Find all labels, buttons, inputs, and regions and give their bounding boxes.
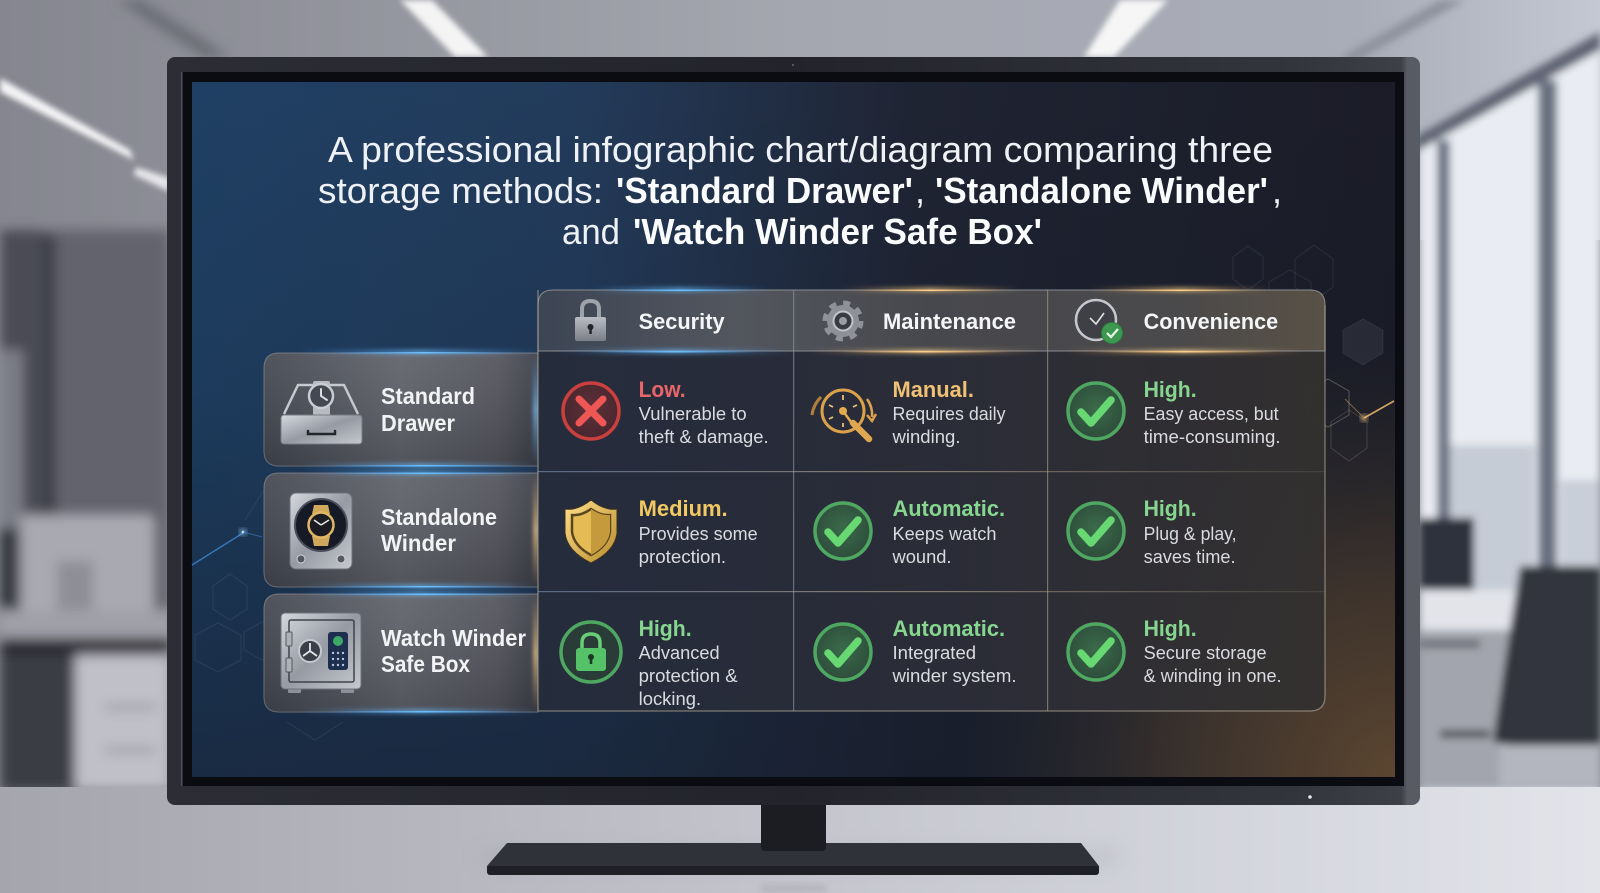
label text: Standard — [381, 383, 475, 409]
row label: Standard Drawer — [264, 350, 540, 467]
label text: Drawer — [381, 410, 455, 436]
icon: gold shield — [565, 500, 617, 563]
cell: Safe Box maintenance: winder system. — [891, 665, 1016, 686]
screen background — [192, 82, 1395, 777]
icon: green check — [1068, 503, 1124, 559]
icon: green check — [815, 624, 871, 680]
row label: Standalone Winder — [264, 471, 540, 588]
icon: gear — [827, 305, 859, 337]
header: Security — [575, 301, 725, 341]
cell: Standard Drawer maintenance — [812, 377, 1006, 447]
cell: Standalone Winder security: protection. — [639, 546, 726, 567]
title: , — [1272, 170, 1282, 211]
cell: Standalone Winder maintenance: Automatic. — [892, 496, 1005, 521]
header: Convenience: Convenience — [1144, 309, 1278, 334]
cell: Safe Box security: protection & — [639, 665, 738, 686]
cell: Standalone Winder convenience: High. — [1144, 496, 1197, 521]
cell: Standalone Winder security — [565, 496, 758, 567]
cell: Standalone Winder convenience — [1068, 496, 1237, 567]
icon: safe box — [281, 613, 361, 693]
label text: Safe Box — [381, 651, 470, 677]
cell: Safe Box convenience — [1068, 616, 1282, 686]
title: 'Standard Drawer' — [616, 170, 913, 211]
cell: Standard Drawer convenience: time-consuming. — [1144, 426, 1281, 447]
light streak: right — [1345, 399, 1394, 421]
icon: green check — [815, 503, 871, 559]
cell: Standard Drawer maintenance: Requires daily — [892, 403, 1006, 424]
icon: green check — [1068, 624, 1124, 680]
header: Security: Security — [639, 309, 725, 334]
cell: Standalone Winder maintenance: wound. — [892, 546, 952, 567]
panel: comparison table — [538, 288, 1325, 711]
cell: Standard Drawer security: theft & damage. — [639, 426, 769, 447]
cell: Safe Box security: High. — [639, 616, 692, 641]
cell: Standalone Winder security: Provides some — [639, 523, 758, 544]
cell: Standard Drawer convenience: High. — [1144, 377, 1197, 402]
label text — [381, 383, 475, 436]
icon: manual winding dial — [812, 390, 876, 439]
title: 'Watch Winder Safe Box' — [633, 211, 1042, 252]
cell: Standalone Winder maintenance — [815, 496, 1005, 567]
monitor stand — [487, 800, 1099, 875]
decorative hexagons — [195, 245, 1383, 740]
cell: Safe Box convenience: & winding in one. — [1144, 665, 1282, 686]
label text — [381, 504, 497, 556]
label text: Winder — [381, 530, 456, 556]
icon: drawer with watch — [281, 381, 362, 444]
cell: Standard Drawer convenience: Easy access, but — [1144, 403, 1279, 424]
cell: Safe Box maintenance: Integrated — [892, 642, 976, 663]
title: 'Standalone Winder' — [935, 170, 1268, 211]
header: Maintenance: Maintenance — [883, 309, 1016, 334]
desk surface — [0, 787, 1600, 893]
header row — [538, 288, 1325, 353]
header: Convenience — [1076, 300, 1278, 344]
label text: Standalone — [381, 504, 497, 530]
cell: Standard Drawer security: Low. — [639, 377, 686, 402]
cell: Standard Drawer convenience — [1068, 377, 1281, 447]
label text: Watch Winder — [381, 625, 526, 651]
icon: padlock — [575, 301, 606, 341]
monitor frame — [167, 57, 1420, 805]
light streak: left — [192, 529, 262, 565]
header: Maintenance — [827, 305, 1016, 337]
panel: row labels — [264, 350, 540, 713]
cell: Standalone Winder maintenance: Keeps watch — [892, 523, 996, 544]
icon: red cross — [563, 383, 619, 439]
icon: clock with check — [1076, 300, 1122, 344]
row label: Watch Winder Safe Box — [264, 592, 540, 713]
cell: Standard Drawer maintenance: winding. — [891, 426, 960, 447]
title — [318, 129, 1282, 252]
cell: Safe Box convenience: High. — [1144, 616, 1197, 641]
cell: Standalone Winder convenience: saves time. — [1144, 546, 1236, 567]
cell: Standard Drawer security — [563, 377, 769, 447]
title: and — [562, 211, 620, 252]
grid lines — [538, 290, 1325, 711]
icon: green padlock — [561, 622, 621, 682]
icon: watch winder — [290, 493, 352, 569]
cell: Standard Drawer security: Vulnerable to — [639, 403, 747, 424]
cell: Safe Box security: locking. — [639, 688, 701, 709]
icon: green check — [1068, 383, 1124, 439]
cell: Standalone Winder convenience: Plug & play, — [1144, 523, 1237, 544]
title: A professional infographic chart/diagram comparing three — [328, 129, 1273, 170]
cell: Safe Box maintenance — [815, 616, 1016, 686]
cell: Safe Box security: Advanced — [639, 642, 720, 663]
cell: Safe Box maintenance: Automatic. — [892, 616, 1005, 641]
cell: Safe Box convenience: Secure storage — [1144, 642, 1267, 663]
title: , — [915, 170, 925, 211]
cell: Safe Box security — [561, 616, 738, 709]
table outline — [538, 290, 1325, 711]
cell: Standard Drawer maintenance: Manual. — [892, 377, 974, 402]
title: storage methods: — [318, 170, 603, 211]
cell: Standalone Winder security: Medium. — [639, 496, 728, 521]
label text — [381, 625, 526, 677]
